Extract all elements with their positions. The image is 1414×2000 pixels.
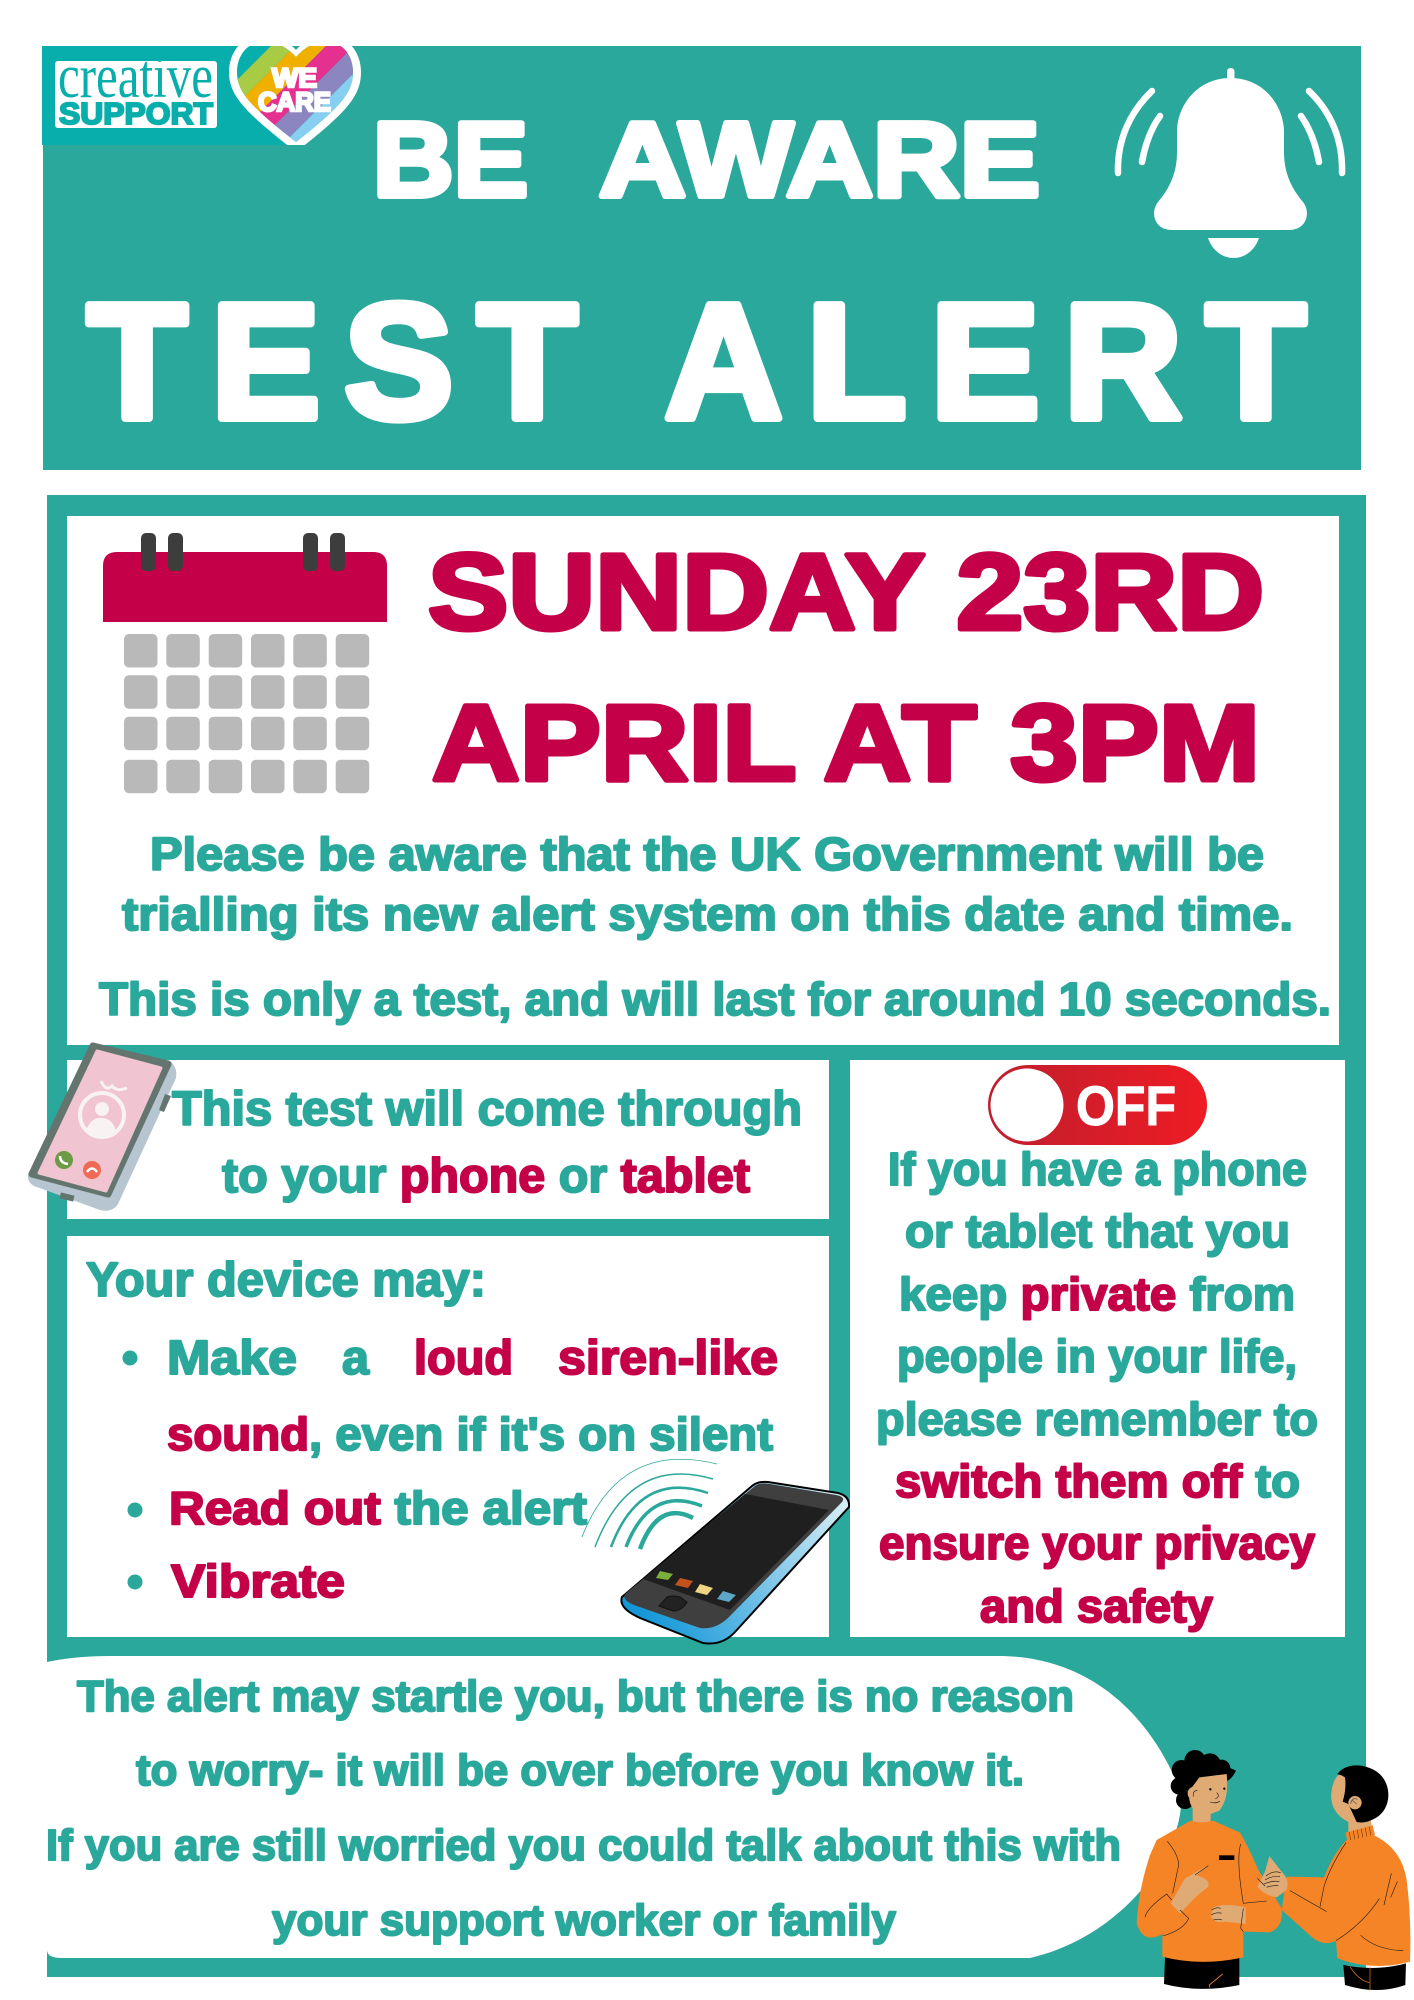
icon: off toggle	[988, 1065, 1207, 1145]
logo: Creative Support	[42, 43, 292, 145]
heading: TEST ALERT: TEST ALERT	[87, 270, 1306, 453]
panel: phone or tablet	[67, 1060, 829, 1219]
panel: your device may	[67, 1236, 829, 1637]
person: left man	[1137, 1750, 1282, 1989]
bullet list: loud	[414, 1332, 513, 1385]
text: privacy advice: keep private from	[899, 1268, 1295, 1320]
heading: BE AWARE	[373, 101, 1040, 219]
person: right man	[1257, 1765, 1410, 1991]
text: privacy advice: switch them off to	[895, 1455, 1300, 1507]
logo: Creative Support: SUPPORT	[59, 96, 213, 131]
intro text: This is only a test, and will last for around 10 seconds.	[99, 973, 1331, 1025]
text: privacy advice: and safety	[980, 1580, 1213, 1632]
logo: We Care rainbow heart	[229, 46, 361, 145]
header banner	[42, 0, 1361, 470]
icon: ringing bell	[1118, 68, 1342, 258]
logo: Creative Support: creative	[58, 43, 213, 111]
text: privacy advice: ensure your privacy	[879, 1517, 1315, 1569]
heading: time: APRIL AT 3PM	[432, 682, 1260, 803]
intro text	[99, 828, 1331, 1025]
bullet list: a	[342, 1332, 369, 1385]
panel: switch off advice	[850, 1060, 1345, 1637]
icon: calendar	[103, 533, 387, 793]
bullet list	[122, 1332, 778, 1607]
icon: signal waves	[582, 1459, 717, 1549]
text: reassurance: The alert may startle you, but there is no reason	[77, 1672, 1074, 1721]
bullet list: Vibrate	[171, 1555, 345, 1607]
bullet list: Read out the alert	[169, 1482, 587, 1534]
text: reassurance: to worry- it will be over before you know it.	[136, 1746, 1024, 1795]
text: comes through to phone or tablet	[172, 1083, 802, 1203]
bullet list: siren-like	[558, 1332, 778, 1385]
main teal panel	[47, 495, 1366, 1977]
icon: smartphone	[621, 1482, 849, 1644]
heading: BE AWARE: AWARE	[599, 101, 1040, 219]
text: privacy advice	[876, 1143, 1318, 1632]
icon: off toggle: OFF	[1076, 1074, 1176, 1137]
text: comes through to phone or tablet: to your phone or tablet	[222, 1150, 750, 1203]
heading: your device may: Your device may:	[86, 1254, 486, 1307]
bullet list: sound, even if it's on silent	[167, 1408, 773, 1460]
text: reassurance: your support worker or family	[272, 1896, 897, 1945]
text: privacy advice: people in your life,	[897, 1330, 1297, 1382]
logo: We Care rainbow heart: WE	[272, 63, 317, 93]
text: reassurance	[46, 1672, 1121, 1945]
intro text: Please be aware that the UK Government will be	[150, 828, 1264, 880]
illustration: two people talking	[1137, 1750, 1410, 1991]
bullet list: Make	[167, 1332, 297, 1385]
icon: pink phone	[28, 1046, 176, 1211]
intro text: trialling its new alert system on this date and time.	[122, 888, 1293, 940]
text: comes through to phone or tablet: This test will come through	[172, 1083, 802, 1136]
text: reassurance: If you are still worried you could talk about this with	[46, 1821, 1121, 1870]
logo: We Care rainbow heart: CARE	[258, 87, 331, 117]
text: privacy advice: please remember to	[876, 1393, 1318, 1445]
text: privacy advice: or tablet that you	[905, 1205, 1290, 1257]
panel: date and intro	[67, 516, 1339, 1045]
heading: BE AWARE: BE	[373, 101, 528, 219]
panel: reassurance speech bubble	[46, 1656, 1181, 1958]
text: privacy advice: If you have a phone	[888, 1143, 1307, 1195]
heading: date: SUNDAY 23RD	[428, 531, 1264, 652]
